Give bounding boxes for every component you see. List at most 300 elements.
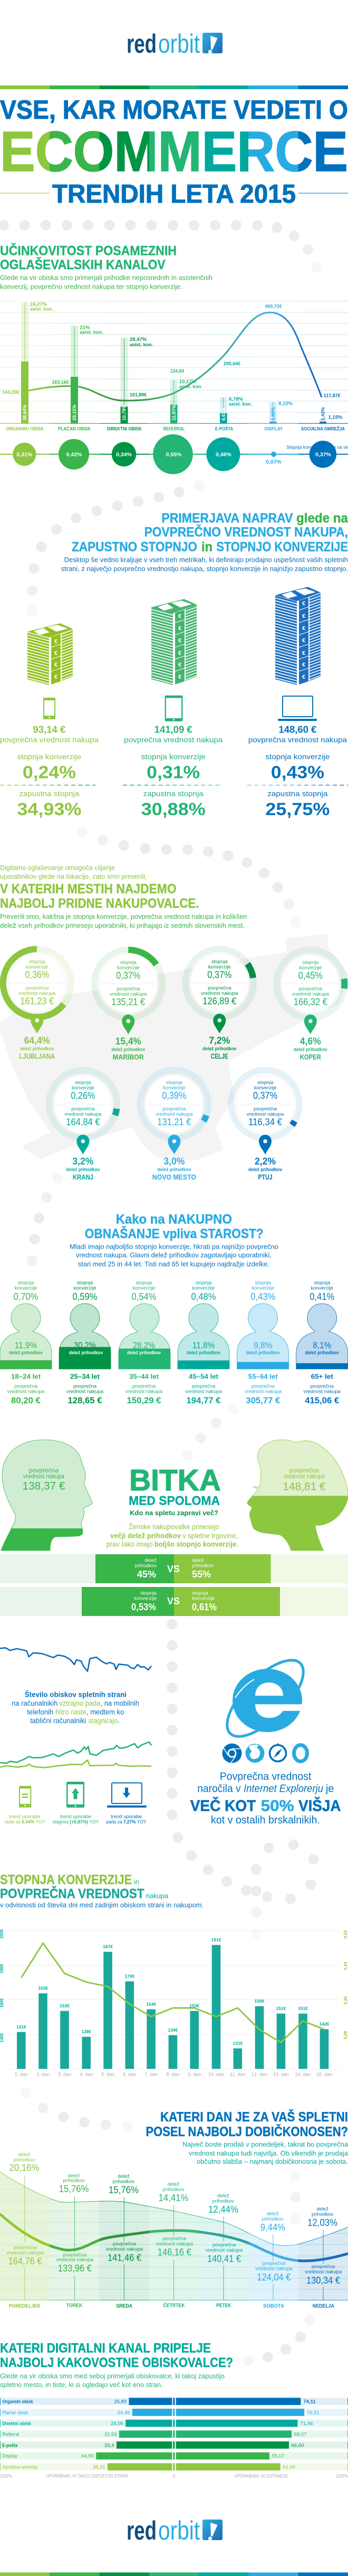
bar value labels: 139€ — [168, 2027, 178, 2032]
row: E-pošta: 66,60 — [292, 2442, 304, 2449]
city: Celje: vrednost nakupa — [201, 991, 238, 996]
age group 18-24: stopnja — [18, 1280, 34, 1286]
heading: age: Kako na NAKUPNO — [116, 1212, 232, 1227]
bar: conversion rate by gender: konverzije — [192, 1596, 215, 1602]
assisted conversion labels: 28,47% — [130, 337, 147, 343]
labels: share of revenue: 20,16% — [9, 2162, 39, 2173]
day labels: 9. dan — [188, 2072, 201, 2077]
text: age intro: Mladi imajo najboljšo stopnjo konverzije, hkrati pa najnižjo povprečno — [70, 1243, 278, 1251]
city: Ptuj: vrednost nakupa — [247, 1111, 284, 1117]
age group 25-34: 30,2% — [74, 1340, 96, 1350]
age group 35-44: konverzije — [133, 1286, 155, 1291]
text: gender summary — [107, 1523, 238, 1548]
day labels: 2. dan — [36, 2072, 50, 2077]
city: Koper: konverzije — [299, 965, 322, 971]
weekday names: ČETRTEK — [163, 2302, 185, 2309]
curve value labels: 101,89€ — [130, 392, 147, 398]
curve: average order value — [25, 312, 322, 401]
city: Novo mesto: 0,39% — [162, 1090, 186, 1101]
city: Koper: 0,45% — [298, 970, 323, 981]
city: Ljubljana: konverzije — [26, 964, 49, 970]
age group 25-34: 25–34 let — [70, 1373, 100, 1381]
icon: money stack tablet: € — [178, 613, 181, 620]
city: Maribor: 15,4% — [115, 1036, 141, 1047]
text: device trends: stagnira (+0,87%) YOY — [53, 1819, 99, 1825]
labels: average order value: 124,04 € — [257, 2272, 291, 2283]
panel: desktop metrics: zapustna stopnja — [267, 790, 328, 798]
panel: mobile metrics: zapustna stopnja — [19, 790, 80, 798]
line: conversion rate — [21, 1943, 324, 2042]
assisted conversion labels: 6,78% — [229, 396, 243, 402]
text: channel intro: konverzij, povprečno vrednost nakupa ter stopnjo konverzije. — [0, 283, 182, 291]
chart: conversion rate bubbles — [0, 434, 348, 474]
age group 18-24 — [0, 1280, 52, 1405]
city: Maribor: MARIBOR — [113, 1052, 144, 1061]
weekday names: PONEDELJEK — [9, 2303, 41, 2309]
weekday names: SREDA — [116, 2303, 133, 2309]
icon: laptop trend — [107, 1783, 147, 1808]
age group 18-24: konverzije — [15, 1286, 37, 1291]
age group 55-64: 305,77 € — [246, 1395, 281, 1405]
text: weekday intro: Največ boste prodali v ponedeljek, takrat bo povprečna — [182, 2141, 348, 2149]
icon: money stack desktop: € — [302, 638, 305, 644]
city: Novo mesto: delež prihodkov — [157, 1167, 191, 1172]
labels: share of revenue: 14,41% — [158, 2193, 189, 2203]
heading: channel effectiveness: OGLAŠEVALSKIH KANALOV — [0, 256, 166, 272]
row: Plačan obisk — [0, 2409, 348, 2416]
heading: cities: NAJBOLJ PRIDNE NAKUPOVALCE. — [0, 896, 199, 911]
row: Organski obisk: 25,89 — [114, 2399, 127, 2405]
row: Display — [0, 2453, 348, 2459]
curve value labels — [2, 304, 341, 399]
row: Display: Display — [2, 2453, 17, 2459]
row: Direktni obisk: Direktni obisk — [2, 2421, 32, 2427]
channel names: REFERRAL — [163, 426, 185, 432]
icon: Internet Explorer — [215, 1648, 315, 1748]
city: Ljubljana: vrednost nakupa — [18, 991, 56, 996]
city: Koper: 4,6% — [300, 1036, 321, 1047]
age group 35-44: povprečna — [132, 1384, 156, 1390]
text: visits summary: , medtem ko — [86, 1708, 124, 1716]
bar value labels: 170€ — [124, 1973, 135, 1979]
panel: desktop metrics: 148,60 € — [278, 725, 316, 735]
labels: share of revenue: prihodkov — [63, 2178, 85, 2184]
row: Organski obisk: Organski obisk — [2, 2399, 33, 2405]
labels: share of revenue: delež — [68, 2173, 80, 2179]
icon: money stack desktop: € — [302, 650, 305, 657]
city: Ptuj: konverzije — [254, 1085, 276, 1091]
age group 18-24: 80,20 € — [11, 1395, 41, 1405]
city: Kranj: delež prihodkov — [66, 1167, 100, 1172]
age group 35-44: 35–44 let — [129, 1373, 159, 1381]
city: Maribor: stopnja — [120, 959, 137, 965]
city: Ptuj: povprečna — [254, 1106, 277, 1112]
labels: average order value: povprečna — [212, 2242, 236, 2248]
age group 18-24: vrednost nakupa — [7, 1389, 45, 1395]
city: Ljubljana: 0,36% — [25, 969, 49, 980]
text: Internet Explorer callout: VEČ KOT — [190, 1797, 256, 1815]
age group 45-54: 11,8% — [192, 1340, 215, 1350]
text: Internet Explorer callout: 50% — [261, 1798, 294, 1815]
panel: tablet metrics: povprečna vrednost nakupa — [124, 736, 223, 744]
labels: share of revenue: delež — [217, 2193, 229, 2199]
icon: tablet — [165, 696, 182, 721]
text: visits summary: hitro raste — [55, 1708, 86, 1716]
labels: share of revenue: 15,76% — [109, 2184, 139, 2195]
age group 55-64: povprečna — [252, 1384, 275, 1390]
age group 45-54: konverzije — [192, 1286, 215, 1291]
assisted conversion labels: 21% — [80, 325, 90, 331]
icon: money stack tablet — [151, 599, 197, 685]
heading: device comparison — [72, 511, 348, 554]
bar value labels: 187€ — [103, 1944, 113, 1949]
city: Ljubljana: 64,4% — [24, 1035, 50, 1045]
chart: conversion rate bubbles: 0,07% — [266, 459, 282, 465]
icon: money stack desktop: € — [302, 613, 305, 620]
text: Internet Explorer callout: naročila v — [197, 1783, 241, 1795]
city: Koper: povprečna — [299, 986, 323, 992]
age group 35-44: delež prihodkov — [127, 1350, 161, 1355]
bar: conversion rate by gender: VS — [167, 1596, 180, 1607]
heading: age: OBNAŠANJE vpliva STAROST? — [85, 1225, 264, 1241]
bar: conversion rate by gender: konverzije — [134, 1596, 157, 1602]
city: Koper: vrednost nakupa — [292, 991, 330, 997]
text: visits summary: Število obiskov spletnih strani — [25, 1691, 127, 1699]
age group 45-54: delež prihodkov — [187, 1350, 220, 1355]
age group 35-44 — [119, 1280, 170, 1405]
text: gender summary: boljšo stopnjo konverzije. — [154, 1540, 238, 1548]
age group 35-44: 150,29 € — [127, 1395, 161, 1405]
bar values: 6,63% — [221, 408, 226, 421]
row: Referral — [0, 2430, 348, 2438]
heading: battle of the sexes: BITKA — [129, 1463, 221, 1497]
text: visits summary: telefonih — [27, 1708, 53, 1716]
text: Internet Explorer callout: je — [325, 1783, 334, 1795]
assisted conversion labels: asist. kon. — [30, 307, 53, 312]
logo: redorbit bottom — [127, 2516, 223, 2545]
axis labels — [0, 1929, 348, 2042]
heading: best weekday — [146, 2108, 348, 2139]
bar: revenue share by gender — [0, 1554, 348, 1583]
bar: revenue share by gender: 45% — [137, 1569, 156, 1580]
text: weekday intro: občutno slabša – najmanj dobičkonosna je sobota. — [197, 2157, 348, 2165]
panel: female head — [247, 1440, 348, 1551]
city: Ljubljana: povprečna — [25, 985, 49, 991]
labels: average order value: vrednost nakupa — [255, 2266, 293, 2272]
city: Maribor: povprečna — [117, 986, 140, 992]
axis captions: 100% — [0, 2474, 12, 2479]
heading: visitor quality: KATERI DIGITALNI KANAL PRIPELJE — [0, 2341, 211, 2356]
chart: conversion rate bubbles: 0,34% — [116, 452, 132, 458]
chart: desktop visits trend — [0, 1648, 151, 1671]
labels: share of revenue: prihodkov — [13, 2157, 35, 2163]
text: channel intro: Glede na vir obiska smo primerjali prihodke neposrednih in asistenčnih — [0, 274, 212, 282]
age group 65+: delež prihodkov — [305, 1350, 339, 1355]
bar value labels: 153€ — [189, 2003, 199, 2008]
icon: money stack desktop: € — [302, 674, 305, 680]
axis captions: UPORABNIKI, KI OSTANEJO — [234, 2474, 288, 2479]
bar value labels: 131€ — [233, 2040, 243, 2046]
bar value labels: 191€ — [211, 1937, 221, 1942]
labels: average order value: 130,34 € — [306, 2275, 340, 2286]
row: Referral: 31,93 — [104, 2432, 117, 2437]
city: Ptuj: 116,34 € — [248, 1117, 282, 1127]
text: weekday intro: vrednost nakupa tudi najvišja. Ob vikendih je prodaja — [189, 2149, 348, 2157]
heading: battle of the sexes: Kdo na spletu zapravi več? — [130, 1509, 218, 1517]
text: visitor quality intro: Glede na vir obiska smo med seboj primerjali obiskovalce, ki takoj zapustijo — [0, 2372, 225, 2380]
bar: revenue share by gender: prihodkov — [135, 1563, 157, 1569]
text: conversion intro: v odvisnosti od števila dni med zadnjim obiskom strani in nakupom. — [0, 1901, 204, 1909]
labels: average order value: vrednost nakupa — [6, 2250, 44, 2256]
channel names: PLAČAN OBISK — [58, 426, 91, 432]
age group 45-54 — [178, 1280, 229, 1405]
labels: average order value: 141,46 € — [108, 2252, 141, 2263]
chart: bounce vs stay bars — [0, 2398, 348, 2479]
channel names: DIREKTNI OBISK — [107, 426, 142, 432]
bar value labels: 153€ — [60, 2003, 70, 2008]
axis captions: 0 — [172, 2474, 176, 2479]
city: Celje: stopnja — [211, 959, 228, 965]
text: visits summary — [12, 1691, 139, 1725]
panel: tablet metrics: 0,31% — [147, 762, 200, 782]
curve value labels: 295,64€ — [224, 361, 241, 367]
labels: share of revenue: delež — [168, 2182, 180, 2188]
labels: share of revenue — [9, 2152, 337, 2233]
bar: revenue share by gender: prihodkov — [192, 1563, 214, 1569]
city: Novo mesto: NOVO MESTO — [152, 1173, 196, 1181]
age group 18-24: 0,70% — [14, 1291, 38, 1302]
heading: age — [85, 1212, 264, 1241]
channel names — [6, 426, 345, 432]
chart: weekday area — [0, 2152, 348, 2309]
text: Internet Explorer callout: VIŠJA — [298, 1797, 341, 1815]
city: Celje: CELJE — [211, 1052, 228, 1060]
row: Referral: Referral — [2, 2432, 20, 2437]
chart: conversion rate bubbles: 0,37% — [315, 452, 332, 458]
bar values — [22, 405, 325, 421]
city: Kranj: povprečna — [71, 1106, 95, 1112]
row: Socialna omrežja: 61,69 — [283, 2465, 295, 2470]
assisted conversion labels: 10,17% — [179, 379, 196, 385]
row: Display: 55,07 — [272, 2453, 284, 2459]
city: Celje: 0,37% — [207, 969, 231, 980]
text: cities lead-in — [0, 863, 147, 880]
row: Organski obisk — [0, 2398, 348, 2405]
chart: conversion rate bubbles: 0,46% — [216, 452, 232, 458]
icon: money stack mobile: € — [54, 674, 57, 680]
heading: battle of the sexes: MED SPOLOMA — [129, 1494, 220, 1508]
age group 55-64: 9,8% — [254, 1340, 272, 1350]
icon: money stack mobile — [27, 623, 73, 685]
text: device trends: trend uporabe — [111, 1814, 142, 1820]
axis captions: UPORABNIKI, KI TAKOJ ZAPUSTIJO STRAN — [46, 2474, 128, 2479]
heading: channel effectiveness: UČINKOVITOST POSAMEZNIH — [0, 242, 177, 258]
logo: redorbit bottom: red — [127, 2516, 157, 2545]
icon: money stack tablet: € — [178, 638, 181, 644]
axis captions: 100% — [336, 2474, 348, 2479]
logo: redorbit bottom: orbit — [158, 2516, 200, 2545]
row: Direktni obisk — [0, 2420, 348, 2427]
age group 45-54: 194,77 € — [187, 1395, 221, 1405]
icon: money stack desktop: € — [302, 625, 305, 632]
text: visits summary: tablični računalniki — [30, 1717, 86, 1725]
assisted conversion labels: 8,15% — [278, 401, 293, 407]
labels: average order value — [6, 2236, 342, 2286]
text: cities intro: Preverili smo, kakšna je stopnja konverzije, povprečna vrednost nakupa in kolikšen — [0, 912, 247, 920]
panel: tablet metrics — [124, 696, 223, 819]
icon: money stack desktop: € — [302, 601, 305, 607]
row: Plačan obisk: 24,49 — [118, 2410, 130, 2416]
row: E-pošta — [0, 2441, 348, 2449]
age group 55-64: 0,43% — [250, 1291, 275, 1302]
heading: device comparison: in — [201, 539, 212, 554]
heading: channel effectiveness — [0, 242, 177, 272]
bar value labels: 151€ — [298, 2005, 308, 2011]
labels: share of revenue: delež — [18, 2152, 31, 2158]
assisted conversion labels: asist. kon. — [130, 342, 153, 348]
age group 18-24: delež prihodkov — [9, 1350, 43, 1355]
heading: visitor quality — [0, 2341, 233, 2370]
city: Maribor: konverzije — [117, 965, 140, 971]
logo: redorbit top: orbit — [158, 29, 200, 59]
row: Socialna omrežja: 38,31 — [93, 2465, 105, 2470]
axis labels: 0,44 — [343, 1962, 348, 1970]
day labels: 3. dan — [58, 2072, 71, 2077]
row: Socialna omrežja — [0, 2463, 348, 2470]
day labels: 12. dan — [252, 2072, 267, 2077]
age group 35-44: stopnja — [136, 1280, 152, 1286]
bar values: 1,40% — [270, 407, 276, 421]
city: Novo mesto — [140, 1070, 208, 1181]
age group 25-34: stopnja — [77, 1280, 93, 1286]
labels: average order value: vrednost nakupa — [305, 2269, 342, 2275]
city: Ljubljana: LJUBLJANA — [19, 1052, 55, 1060]
labels: share of revenue: prihodkov — [262, 2217, 284, 2222]
text: cities lead-in: Digitalno oglaševanje omogoča ciljanje — [0, 863, 115, 871]
row: E-pošta: 33,4 — [104, 2442, 114, 2449]
chart: conversion rate bubbles: 0,42% — [66, 452, 82, 458]
assisted conversion labels: 1,15% — [328, 415, 343, 421]
bar: revenue share by gender: delež — [192, 1558, 204, 1564]
bar: revenue share by gender: delež — [144, 1558, 157, 1564]
curve value labels: 117,87€ — [324, 393, 341, 399]
icon: money stack mobile: € — [54, 662, 57, 668]
age group 65+: 65+ let — [311, 1373, 333, 1381]
city: Novo mesto: povprečna — [162, 1106, 186, 1112]
bottom colour bar — [0, 2572, 348, 2576]
day labels: 14. dan — [295, 2072, 311, 2077]
labels: average order value: vrednost nakupa — [206, 2248, 243, 2254]
icon: Chrome — [223, 1744, 241, 1763]
city: Kranj: 0,26% — [71, 1090, 95, 1101]
city: Maribor — [94, 950, 162, 1061]
day labels — [15, 2072, 332, 2077]
logo: redorbit top: red — [127, 29, 157, 59]
text: channel intro — [0, 274, 212, 291]
labels: average order value: 164,76 € — [8, 2256, 42, 2267]
city: Kranj: KRANJ — [73, 1173, 93, 1181]
text: cities intro: delež vseh prihodkov prinesejo uporabniki, ki prihajajo iz sedmih slovenskih mest. — [0, 921, 245, 929]
labels: average order value: povprečna — [13, 2245, 37, 2251]
bar: conversion rate by gender — [0, 1587, 348, 1616]
assisted conversion labels — [30, 301, 343, 421]
age group 65+: vrednost nakupa — [304, 1389, 341, 1395]
text: device trends: trend uporabe — [9, 1814, 41, 1820]
panel: male head: vrednost nakupa — [23, 1472, 64, 1480]
icon: money stack mobile: € — [54, 650, 57, 657]
city: Novo mesto: 3,0% — [163, 1156, 185, 1166]
age group 65+: 415,06 € — [305, 1395, 340, 1405]
text: device trends: raste za 6,44% YOY — [4, 1819, 45, 1825]
labels: share of revenue: prihodkov — [113, 2179, 134, 2185]
age group 35-44: 28,2% — [133, 1340, 155, 1350]
age group 65+: 0,41% — [310, 1291, 334, 1302]
age group 18-24: 18–24 let — [11, 1373, 41, 1381]
text: device trends: trend uporabe — [60, 1814, 91, 1820]
panel: female head: vrednost nakupa — [284, 1472, 325, 1480]
channel names: ORGANSKI OBISK — [6, 426, 44, 432]
heading: cities: V KATERIH MESTIH NAJDEMO — [0, 882, 177, 897]
text: age intro — [70, 1243, 278, 1268]
axis captions — [0, 2474, 348, 2479]
panel: female head: 148,81 € — [283, 1480, 326, 1493]
age group 65+ — [296, 1280, 348, 1405]
day labels: 8. dan — [166, 2072, 179, 2077]
bar values: 10,79% — [122, 405, 127, 421]
city: Novo mesto: vrednost nakupa — [156, 1111, 193, 1117]
heading: conversion vs order value: POVPREČNA VREDNOST — [0, 1886, 144, 1902]
age group 65+: stopnja — [314, 1280, 331, 1286]
age group 25-34: konverzije — [74, 1286, 96, 1291]
title: TRENDIH LETA 2015 — [52, 180, 296, 208]
icon: money stack tablet: € — [178, 662, 181, 668]
city: Ptuj — [231, 1070, 299, 1181]
weekday names: SOBOTA — [263, 2303, 284, 2309]
chart: conversion rate bubbles: 0,31% — [16, 452, 33, 458]
city: Kranj: 164,84 € — [66, 1117, 100, 1127]
age group 65+: povprečna — [311, 1384, 334, 1390]
text: age intro: stari med 25 in 44 let. Tisti nad 65 let kupujejo najdražje izdelke. — [78, 1260, 269, 1268]
city: Ptuj: delež prihodkov — [248, 1167, 282, 1172]
labels: average order value: povprečna — [113, 2241, 137, 2247]
panel: male head: povprečna — [29, 1467, 59, 1474]
day labels: 6. dan — [123, 2072, 136, 2077]
city: Ptuj: stopnja — [257, 1080, 274, 1086]
age group 25-34: 128,65 € — [67, 1395, 102, 1405]
city: Kranj: 3,2% — [72, 1156, 93, 1166]
text: device intro: strani, z največjo povprečno vrednostjo nakupa, stopnjo konverzije in najnižjo zapustno stopnjo. — [61, 565, 348, 573]
city: Celje: konverzije — [208, 964, 231, 970]
labels: average order value: 133,96 € — [58, 2263, 92, 2274]
text: visits summary: , na mobilnih — [101, 1699, 139, 1707]
text: gender summary: Ženske nakupovalke prinesejo — [129, 1523, 219, 1531]
weekday names — [9, 2302, 334, 2309]
labels: share of revenue: delež — [316, 2207, 328, 2212]
age group 18-24: povprečna — [14, 1384, 38, 1390]
bar values: 1,43% — [321, 407, 326, 421]
panel: male head — [1, 1440, 92, 1551]
bar values: 11,97% — [171, 405, 177, 421]
icon: money stack tablet: € — [178, 674, 181, 680]
row: Direktni obisk: 71,94 — [301, 2421, 313, 2427]
bar: conversion rate by gender: stopnja — [140, 1591, 157, 1596]
labels: share of revenue: prihodkov — [212, 2198, 234, 2204]
labels: average order value: 140,41 € — [207, 2254, 241, 2264]
icon: money stack desktop — [275, 587, 321, 685]
panel: mobile metrics: stopnja konverzije — [17, 752, 82, 761]
age group 55-64: vrednost nakupa — [245, 1389, 282, 1395]
labels: share of revenue: delež — [118, 2174, 130, 2180]
